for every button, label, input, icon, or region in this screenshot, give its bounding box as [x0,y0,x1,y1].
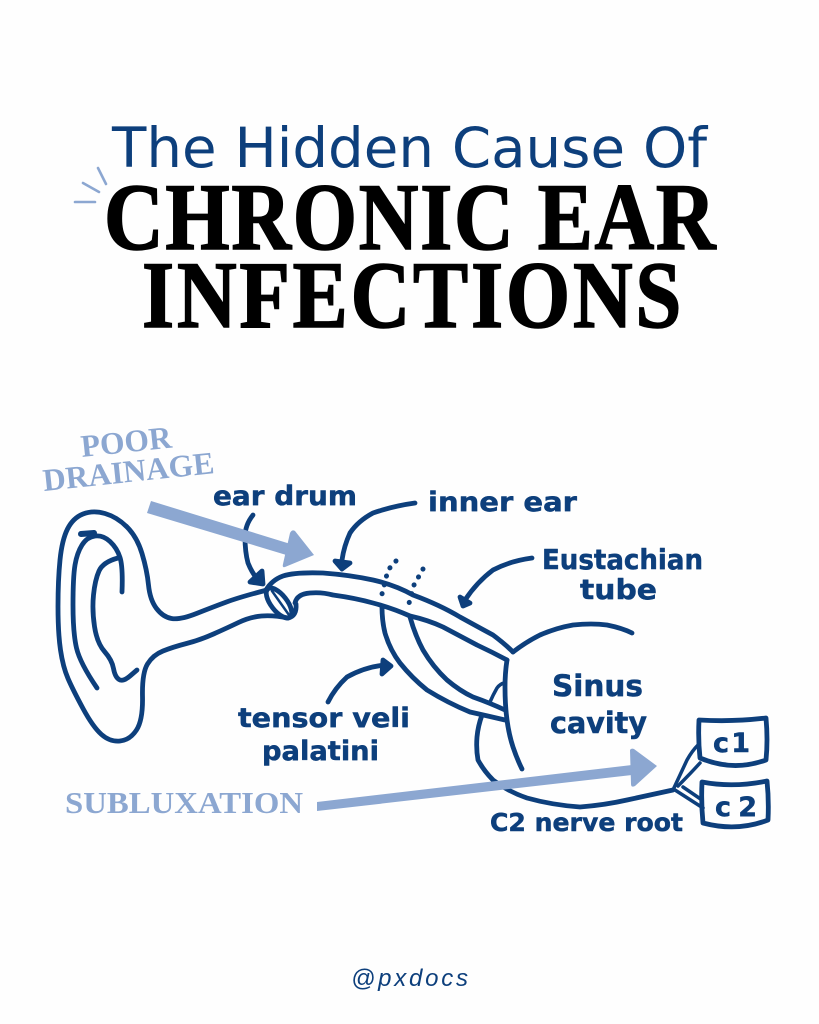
callout: poor drainage [41,420,216,498]
arrow: Eustachian tube [460,558,532,606]
label: tube: tube [580,573,657,606]
arrow: ear drum [245,515,263,584]
C2 nerve root [477,715,673,807]
outer ear and ear canal [58,512,288,741]
title: The Hidden Cause Of: The Hidden Cause Of [111,116,709,180]
heading: CHRONIC EAR: CHRONIC EAR [104,166,717,270]
callout: subluxation: SUBLUXATION [65,785,303,820]
callout: poor drainage: POOR [79,420,174,464]
sinus cavity [513,624,632,652]
label: c2: c2 [715,792,757,823]
arrow: poor drainage [147,501,314,567]
dotted lines [381,561,423,607]
arrow: subluxation [317,749,657,811]
label: cavity: cavity [550,706,647,740]
Eustachian tube [266,573,513,652]
diagram: ear anatomy line drawing [58,503,768,827]
label: inner ear: inner ear [428,487,578,518]
callout: poor drainage: DRAINAGE [41,445,216,498]
ear drum [262,584,296,622]
C1 box [699,718,767,766]
inner ear fold [93,558,137,680]
label: Sinus: Sinus [552,669,643,703]
label: Eustachian: Eustachian [542,543,703,576]
label: c1: c1 [713,728,750,759]
label: C2 nerve root: C2 nerve root [490,808,683,837]
heading: INFECTIONS: INFECTIONS [142,244,681,348]
icon: accent sparks [75,168,106,202]
C2 box [702,781,768,827]
label: palatini: palatini [262,736,379,767]
inner helix [73,536,122,688]
label: tensor veli: tensor veli [238,703,410,734]
tensor veli palatini [382,607,505,720]
label: ear drum: ear drum [213,481,357,512]
arrow: inner ear [335,503,415,569]
footer handle: @pxdocs [351,965,468,992]
arrow: tensor veli palatini [328,660,391,702]
